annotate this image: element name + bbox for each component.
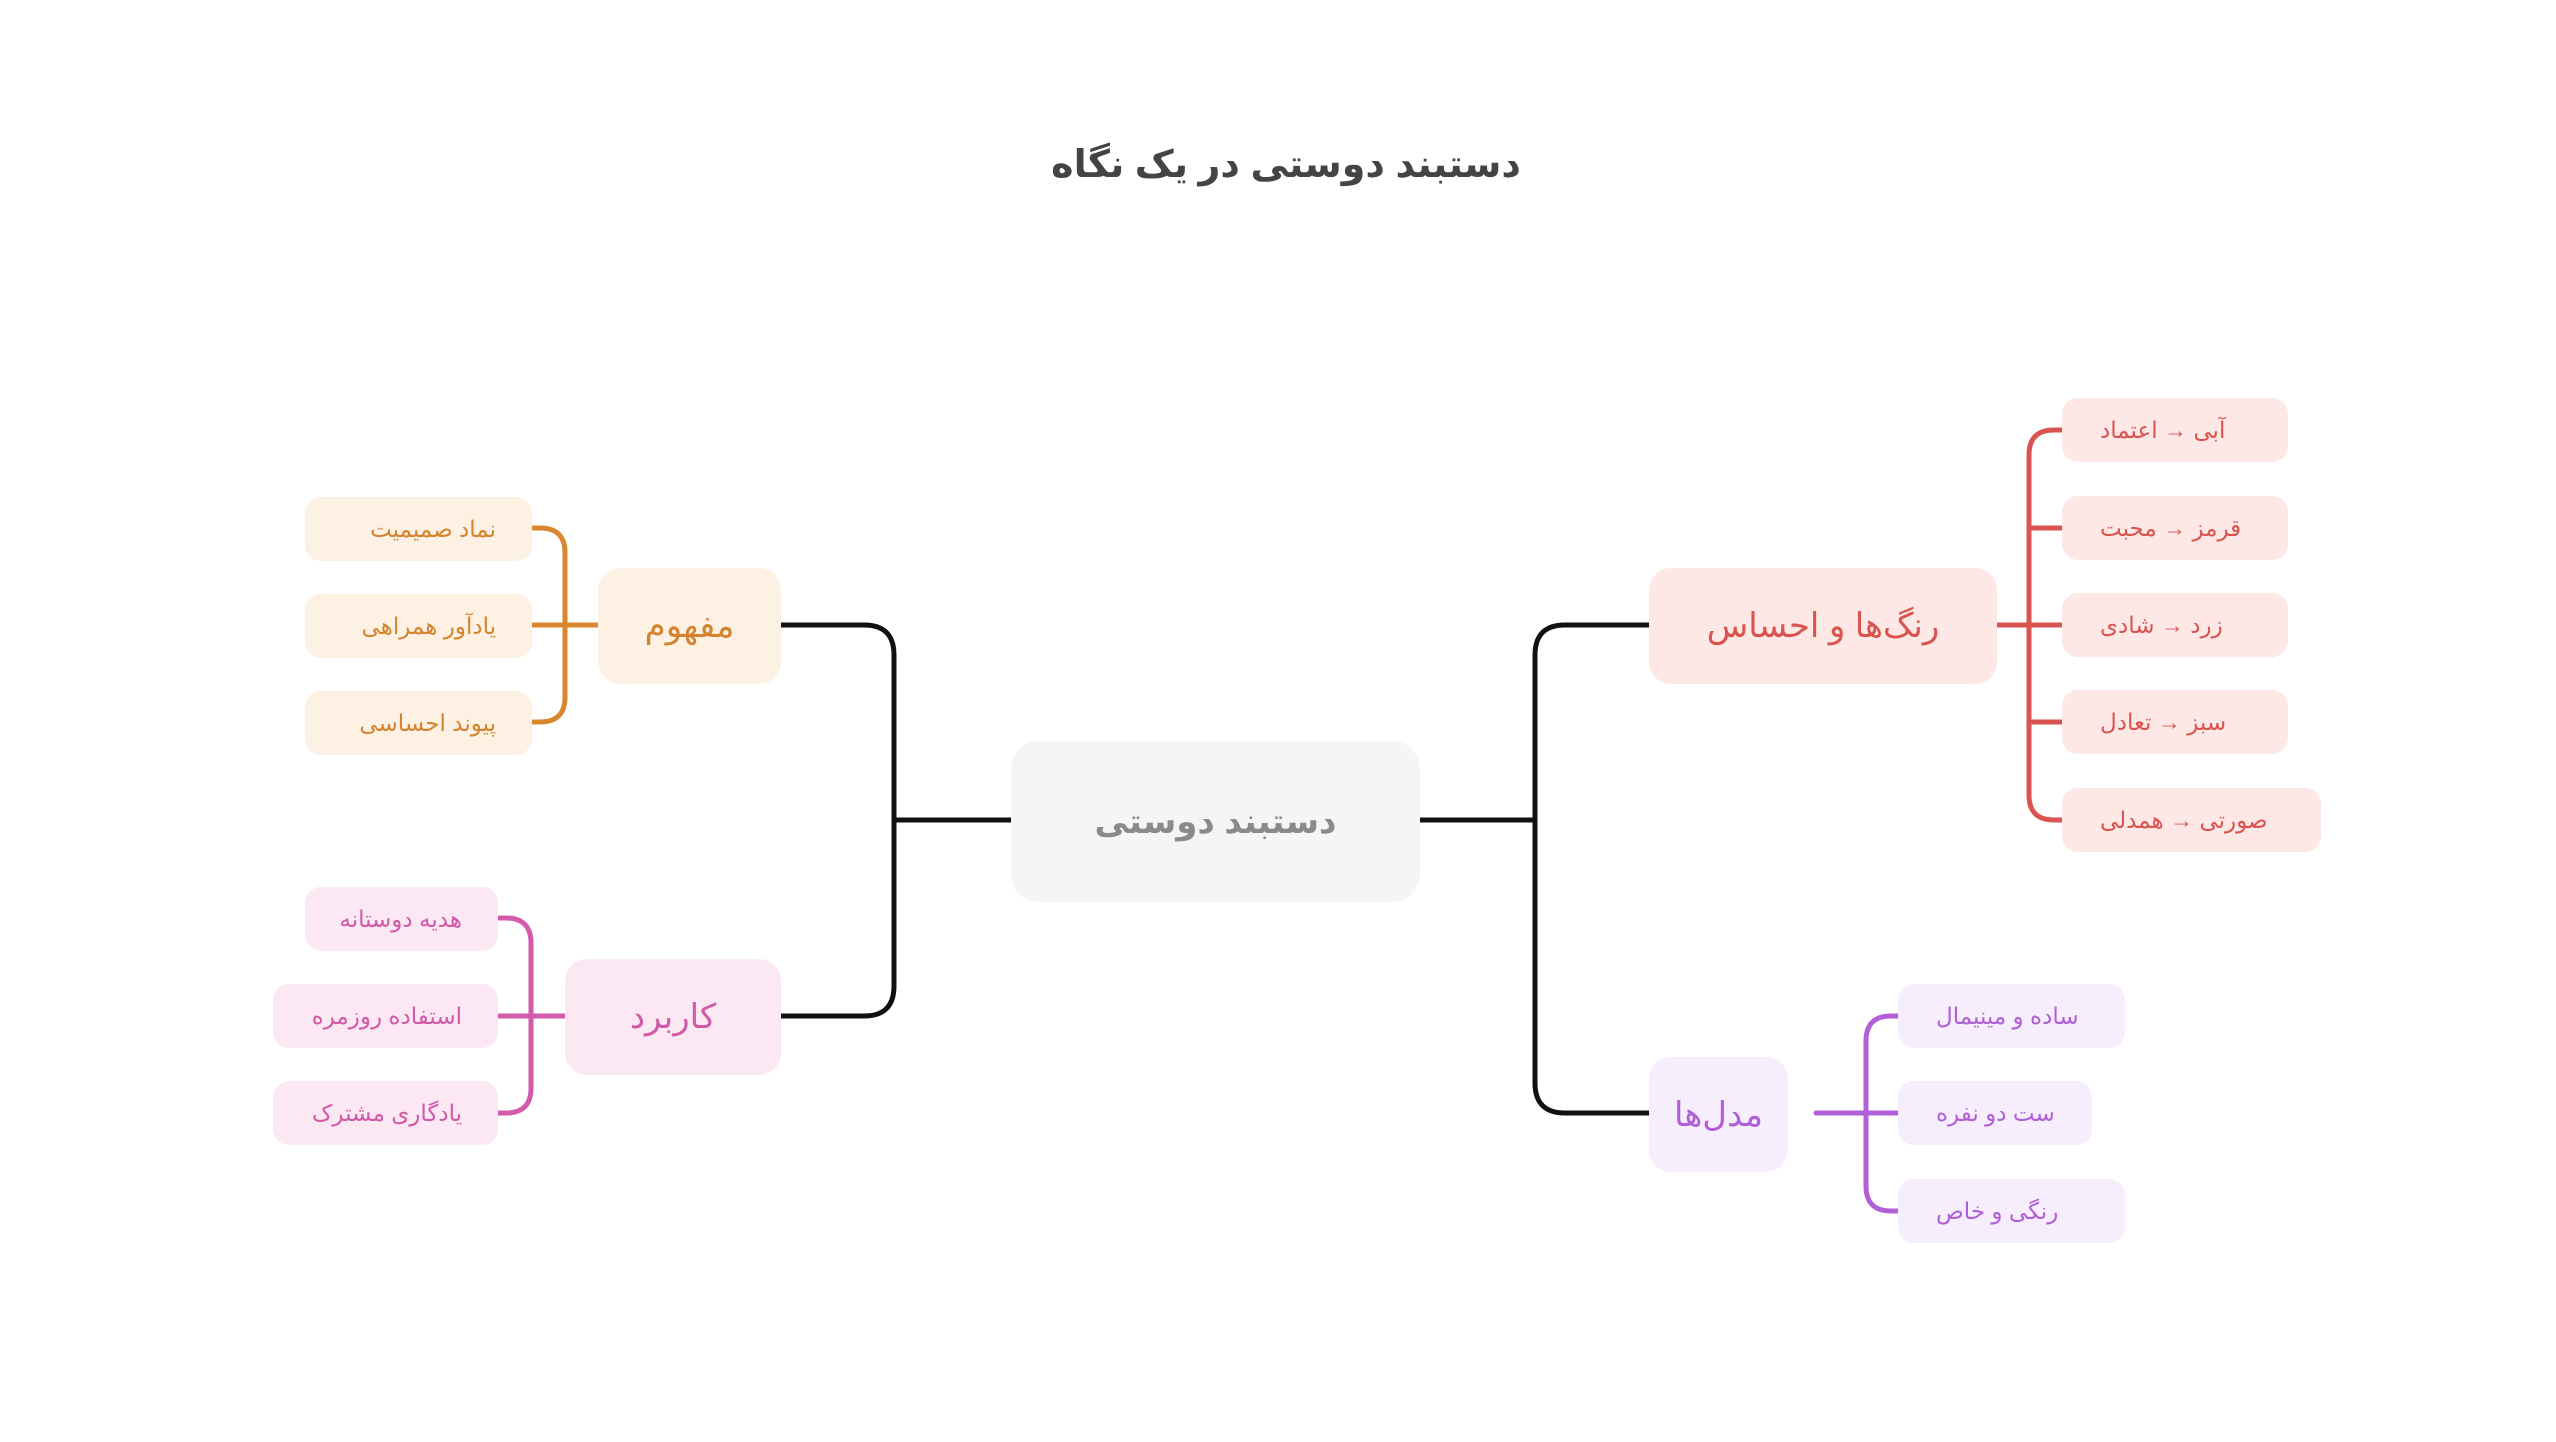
leaf: couple set: ست دو نفره xyxy=(1936,1100,2055,1126)
connector: left black xyxy=(765,625,1027,1016)
leaf: usage 1 xyxy=(305,887,498,951)
leaf: concept 2 xyxy=(305,594,532,658)
leaf: blue xyxy=(2062,398,2288,462)
leaf: concept 3 xyxy=(305,691,532,755)
leaf: blue: آبی → اعتماد xyxy=(2100,416,2225,442)
leaf: concept 1 xyxy=(305,497,532,561)
leaf: concept 1: نماد صمیمیت xyxy=(370,516,496,542)
leaf: pink: صورتی → همدلی xyxy=(2100,806,2268,832)
node: usage: کاربرد xyxy=(630,998,716,1036)
node: usage xyxy=(565,959,781,1075)
node: concept: مفهوم xyxy=(645,607,734,645)
connector: right black xyxy=(1404,625,1666,1113)
leaf: green: سبز → تعادل xyxy=(2100,708,2226,734)
leaf: usage 2: استفاده روزمره xyxy=(312,1002,462,1028)
leaf: yellow: زرد → شادی xyxy=(2100,612,2223,638)
leaf: usage 3: یادگاری مشترک xyxy=(312,1100,462,1126)
leaf: yellow xyxy=(2062,593,2288,657)
leaf: red xyxy=(2062,496,2288,560)
leaf: green xyxy=(2062,690,2288,754)
connector: red xyxy=(1977,430,2079,820)
node: colors and feelings: رنگ‌ها و احساس xyxy=(1707,607,1939,645)
leaf: colorful xyxy=(1898,1179,2125,1243)
leaf: pink xyxy=(2062,788,2321,852)
connector: pink xyxy=(483,918,581,1113)
connector: purple xyxy=(1816,1016,1913,1211)
title: دستبند دوستی در یک نگاه xyxy=(1051,144,1521,186)
node: models xyxy=(1649,1057,1788,1172)
leaf: colorful: رنگی و خاص xyxy=(1936,1198,2058,1224)
connector: orange xyxy=(516,528,614,722)
leaf: concept 2: یادآور همراهی xyxy=(362,612,496,638)
leaf: simple xyxy=(1898,984,2125,1048)
node: concept xyxy=(598,568,781,684)
leaf: usage 1: هدیه دوستانه xyxy=(339,906,462,932)
leaf: usage 3 xyxy=(273,1081,498,1145)
central node: دستبند دوستی xyxy=(1095,802,1336,840)
leaf: simple: ساده و مینیمال xyxy=(1936,1002,2079,1028)
leaf: concept 3: پیوند احساسی xyxy=(359,710,496,736)
node: colors and feelings xyxy=(1649,568,1997,684)
central node xyxy=(1011,741,1420,902)
node: models: مدل‌ها xyxy=(1674,1096,1763,1134)
leaf: red: قرمز → محبت xyxy=(2100,514,2241,540)
leaf: usage 2 xyxy=(273,984,498,1048)
leaf: couple set xyxy=(1898,1081,2092,1145)
